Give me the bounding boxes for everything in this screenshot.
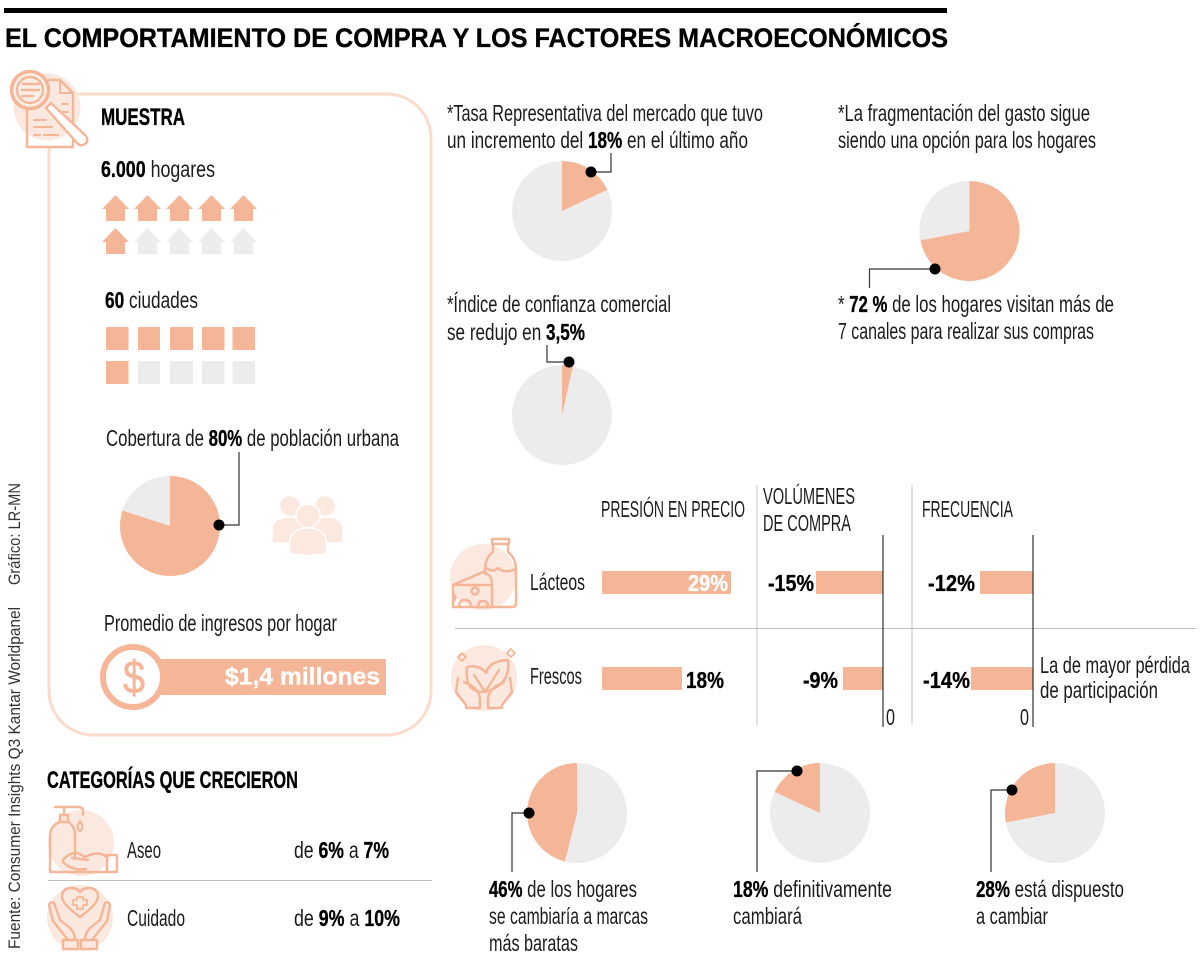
chart: presión, volúmenes y frecuencia [450,483,1196,730]
text: 28% [976,876,1124,929]
pie chart: 72% [870,181,1020,288]
text: cobertura: Cobertura de 80% de población urbana [106,425,400,451]
block: 18% cambiará [733,763,892,929]
text: fragmentación: siendo una opción para los hogares [838,127,1096,153]
bar: ingresos: $ [123,651,145,703]
icon: hand soap [48,807,117,876]
text: 46%: 46% de los hogares [489,876,637,902]
block: 46% marcas baratas [489,763,648,956]
row: cuidado: de 9% a 10% [294,905,400,931]
text: 46% [489,876,648,956]
icon: caring hands [47,885,113,951]
pie chart: 46% [512,763,627,872]
pictogram: houses [102,195,257,254]
column headings [601,483,1013,536]
text: ciudades: 60 ciudades [105,287,198,313]
icon: people [272,496,343,556]
column headings: FRECUENCIA [922,496,1013,522]
block: índice de confianza [447,291,671,465]
text: 72% de los hogares [838,291,1114,344]
bar: ingresos [103,647,386,707]
bar: lácteos volumen -15%: -15% [768,570,814,596]
axis: volumen zero: 0 [886,704,895,730]
text: 46%: más baratas [489,930,578,956]
bar: lácteos frecuencia -12%: -12% [928,570,975,596]
text: 28%: a cambiar [976,903,1048,929]
heading: muestra: MUESTRA [101,104,185,131]
row: cuidado [127,905,400,931]
row: aseo: de 6% a 7% [294,837,389,863]
text: 18%: cambiará [733,903,803,929]
block: 28% dispuesto [976,763,1124,929]
pie chart: 28% [991,763,1105,872]
bar: frescos frecuencia -14%: -14% [923,667,970,693]
axis: frecuencia zero: 0 [1020,704,1029,730]
bar: frescos volumen -9% [803,667,883,693]
column headings: VOLÚMENES [763,483,855,509]
column headings: DE COMPRA [763,510,851,536]
text: promedio de ingresos: Promedio de ingresos por hogar [104,610,337,636]
text: índice de confianza: *Índice de confianza comercial [447,291,671,317]
note: mayor pérdida: de participación [1040,677,1158,703]
bar: lácteos presión 29% [602,570,731,596]
source credit: Gráfico: LR-MN [6,483,24,585]
source credit: Fuente: Consumer Insights Q3 Kantar Worldpanel [6,607,24,949]
text: 18%: 18% definitivamente [733,876,892,902]
text: 28%: 28% está dispuesto [976,876,1124,902]
pictogram: squares [106,327,255,384]
bar: frescos presión 18% [602,667,724,693]
text: 18% [733,876,892,929]
pie chart: 18% [512,153,612,261]
pie chart: cobertura 80% [120,452,239,576]
icon: document and magnifier [12,72,87,147]
text: hogares: 6.000 hogares [101,156,215,182]
text: 72% de los hogares: * 72 % de los hogares visitan más de [838,291,1114,317]
pie chart: 18% definitivamente [757,763,870,872]
bar: frescos volumen -9%: -9% [803,667,838,693]
text: fragmentación [838,100,1096,153]
note: mayor pérdida [1040,652,1191,703]
label: frescos: Frescos [530,663,582,689]
bar: frescos frecuencia -14% [923,667,1033,693]
text: índice de confianza [447,291,671,345]
icon: milk and cheese [450,539,516,610]
title: EL COMPORTAMIENTO DE COMPRA Y LOS FACTORES MACROECONÓMICOS [5,22,948,53]
text: fragmentación: *La fragmentación del gasto sigue [838,100,1090,126]
column headings: PRESIÓN EN PRECIO [601,496,745,522]
text: tasa representativa: *Tasa Representativa del mercado que tuvo [447,100,763,126]
text: tasa representativa [447,100,763,153]
title [4,8,948,53]
pie chart: 3,5% [512,345,612,465]
bar: lácteos volumen -15% [768,570,883,596]
icon: leaves and hands [451,645,517,711]
row: aseo [127,837,389,863]
text: tasa representativa: un incremento del 18% en el último año [447,127,748,153]
text: índice de confianza: se redujo en 3,5% [447,319,585,345]
bar: ingresos: $1,4 millones [225,664,380,690]
bar: lácteos presión 29%: 29% [688,570,728,596]
bar: frescos presión 18%: 18% [686,667,724,693]
text: 46%: se cambiaría a marcas [489,903,648,929]
bar: lácteos frecuencia -12% [928,570,1033,596]
panel: muestra [12,72,431,735]
block: fragmentación del gasto [838,100,1114,344]
label: lácteos: Lácteos [530,569,585,595]
row: cuidado: Cuidado [127,905,185,931]
row: aseo: Aseo [127,837,161,863]
block: tasa representativa [447,100,763,261]
heading: categorías: CATEGORÍAS QUE CRECIERON [47,766,298,794]
panel: categorías que crecieron [47,766,432,951]
